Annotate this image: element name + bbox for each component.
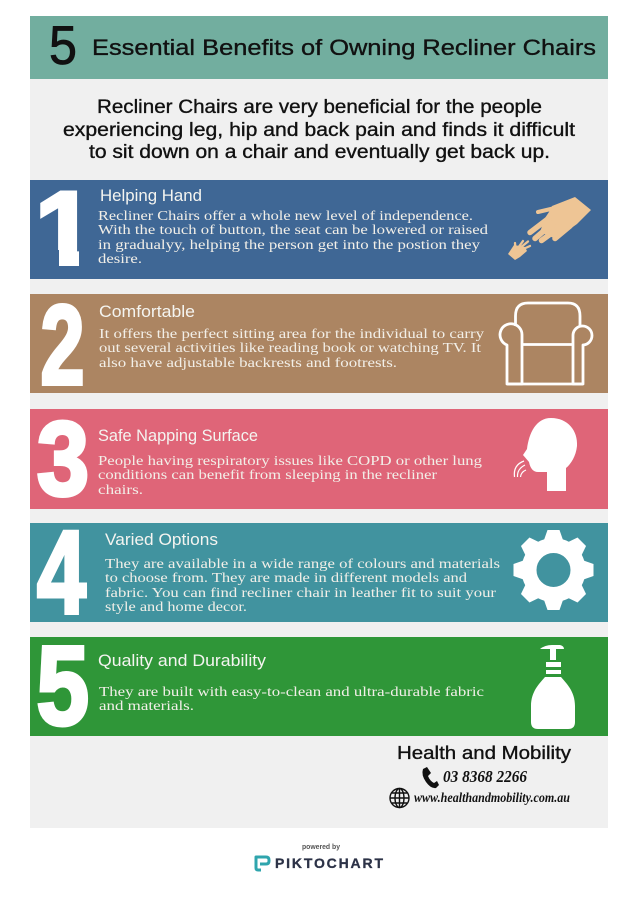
icon: pump bottle (531, 645, 575, 729)
icon: piktochart logo (256, 857, 269, 870)
title text: Essential Benefits of Owning Recliner Chairs (92, 35, 596, 60)
body text: to choose from. They are made in different models and (105, 571, 467, 586)
heading: Helping Hand (100, 186, 202, 205)
heading: Safe Napping Surface (98, 426, 258, 445)
body text: in gradualyy, helping the person get into the postion they (98, 238, 480, 253)
heading: Varied Options (105, 530, 218, 549)
number 1: 1 (35, 171, 95, 287)
body text (105, 557, 500, 615)
piktochart wordmark: PIKTOCHART (275, 855, 383, 871)
panel: benefit 3 safe napping surface (30, 401, 608, 518)
body text: chairs. (98, 483, 143, 498)
number 2: 2 (40, 282, 84, 408)
title number: 5 (49, 14, 77, 76)
icon: head breathing (514, 418, 577, 491)
body text: style and home decor. (105, 600, 247, 615)
body text: and materials. (99, 699, 194, 714)
body text: People having respiratory issues like COPD or other lung (98, 454, 482, 469)
body text: They are available in a wide range of colours and materials (105, 557, 500, 572)
panel: benefit 2 comfortable (30, 282, 608, 408)
page background panel (30, 79, 608, 828)
body text: With the touch of button, the seat can be lowered or raised (98, 223, 488, 238)
phone number: 03 8368 2266 (443, 767, 527, 786)
body text: It offers the perfect sitting area for the individual to carry (99, 327, 484, 342)
number 5: 5 (36, 624, 89, 748)
icon: gear (514, 530, 594, 610)
icon: helping hands (508, 197, 591, 260)
icon: globe (390, 788, 409, 808)
panel: benefit 1 helping hand (30, 171, 608, 287)
body text (99, 685, 484, 714)
heading: Comfortable (99, 302, 195, 321)
panel: benefit 4 varied options (30, 507, 608, 639)
intro text: to sit down on a chair and eventually get back up. (89, 142, 550, 163)
contact block (390, 742, 572, 808)
body text: fabric. You can find recliner chair in leather fit to suit your (105, 586, 496, 601)
body text: conditions can benefit from sleeping in the recliner (98, 468, 437, 483)
body text: They are built with easy-to-clean and ultra-durable fabric (99, 685, 484, 700)
company name: Health and Mobility (397, 742, 572, 763)
body text (98, 454, 482, 498)
intro text: experiencing leg, hip and back pain and finds it difficult (63, 120, 576, 141)
body text: out several activities like reading book or watching TV. It (99, 341, 481, 356)
icon: phone (422, 767, 439, 788)
number 3: 3 (37, 401, 89, 518)
piktochart footer (256, 844, 383, 871)
website: www.healthandmobility.com.au (414, 790, 570, 805)
body text: desire. (98, 252, 142, 267)
body text (99, 327, 484, 371)
powered by text: powered by (302, 844, 340, 851)
body text (98, 209, 488, 267)
number 4: 4 (37, 507, 86, 639)
body text: Recliner Chairs offer a whole new level of independence. (98, 209, 473, 224)
icon: armchair (500, 303, 592, 384)
body text: also have adjustable backrests and footrests. (99, 356, 397, 371)
intro text (63, 97, 576, 163)
heading: Quality and Durability (98, 651, 267, 670)
title banner (30, 14, 608, 79)
panel: benefit 5 quality and durability (30, 624, 608, 748)
intro text: Recliner Chairs are very beneficial for the people (97, 97, 542, 118)
